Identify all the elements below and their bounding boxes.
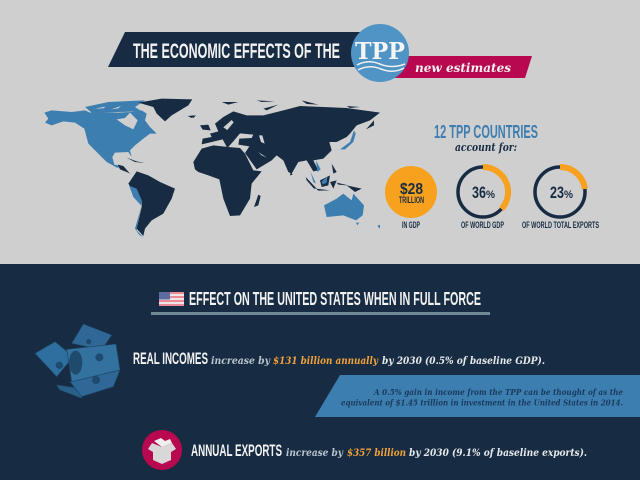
stat: 36% of world GDP: OF WORLD GDP	[461, 220, 504, 230]
stat: 23% of world total exports: 23	[550, 183, 564, 202]
text: annual exports: increase by	[286, 447, 344, 459]
icon: export box	[142, 430, 182, 470]
TPP North America	[44, 100, 157, 237]
stat: 23% of world total exports: %	[564, 189, 573, 201]
stats heading: account for:	[455, 141, 517, 154]
banner: new estimates	[392, 56, 532, 78]
world map	[44, 99, 380, 237]
stat: 36% of world GDP: 36	[472, 183, 486, 202]
text: annual exports: $357 billion	[347, 447, 406, 459]
non-TPP Africa, Europe and Asia	[190, 100, 380, 216]
stat: $28 trillion in GDP	[385, 166, 437, 230]
stat: 36% of world GDP: %	[486, 189, 495, 201]
text: real incomes	[133, 349, 545, 368]
text: real incomes: by 2030 (0.5% of baseline GDP).	[382, 355, 545, 367]
title banner	[108, 24, 532, 82]
stat: 23% of world total exports	[522, 167, 599, 230]
stat: 36% of world GDP	[458, 167, 508, 230]
text: real incomes: REAL INCOMES	[133, 349, 208, 368]
inland seas	[223, 120, 267, 158]
text: annual exports: ANNUAL EXPORTS	[191, 441, 282, 460]
text: annual exports: by 2030 (9.1% of baseline exports).	[409, 447, 587, 459]
badge: TPP logo	[351, 24, 409, 82]
badge: TPP logo: TPP	[355, 38, 405, 65]
icon: US flag	[159, 292, 184, 306]
stats heading: 12 TPP COUNTRIES	[434, 122, 538, 142]
stat: $28 trillion in GDP: TRILLION	[399, 195, 424, 206]
callout: investment equivalent	[315, 375, 640, 417]
stat: $28 trillion in GDP: $28	[400, 181, 423, 198]
non-TPP Americas	[118, 99, 194, 236]
banner: new estimates: new estimates	[415, 60, 511, 75]
text: annual exports	[191, 441, 587, 460]
stats heading	[434, 122, 538, 154]
map: Old World	[190, 100, 380, 229]
map: Americas	[44, 99, 194, 237]
stat: $28 trillion in GDP: IN GDP	[402, 220, 420, 230]
section heading: effect on the United States	[151, 289, 490, 315]
icon: stack of dollar bills	[35, 324, 120, 398]
text: real incomes: increase by	[211, 355, 271, 367]
arctic gaps and Hudson Bay	[95, 106, 138, 129]
TPP Asia-Pacific	[311, 130, 380, 229]
banner: main title: THE ECONOMIC EFFECTS OF THE	[133, 40, 340, 63]
text: real incomes: $131 billion annually	[273, 355, 379, 367]
banner: main title	[108, 32, 362, 67]
